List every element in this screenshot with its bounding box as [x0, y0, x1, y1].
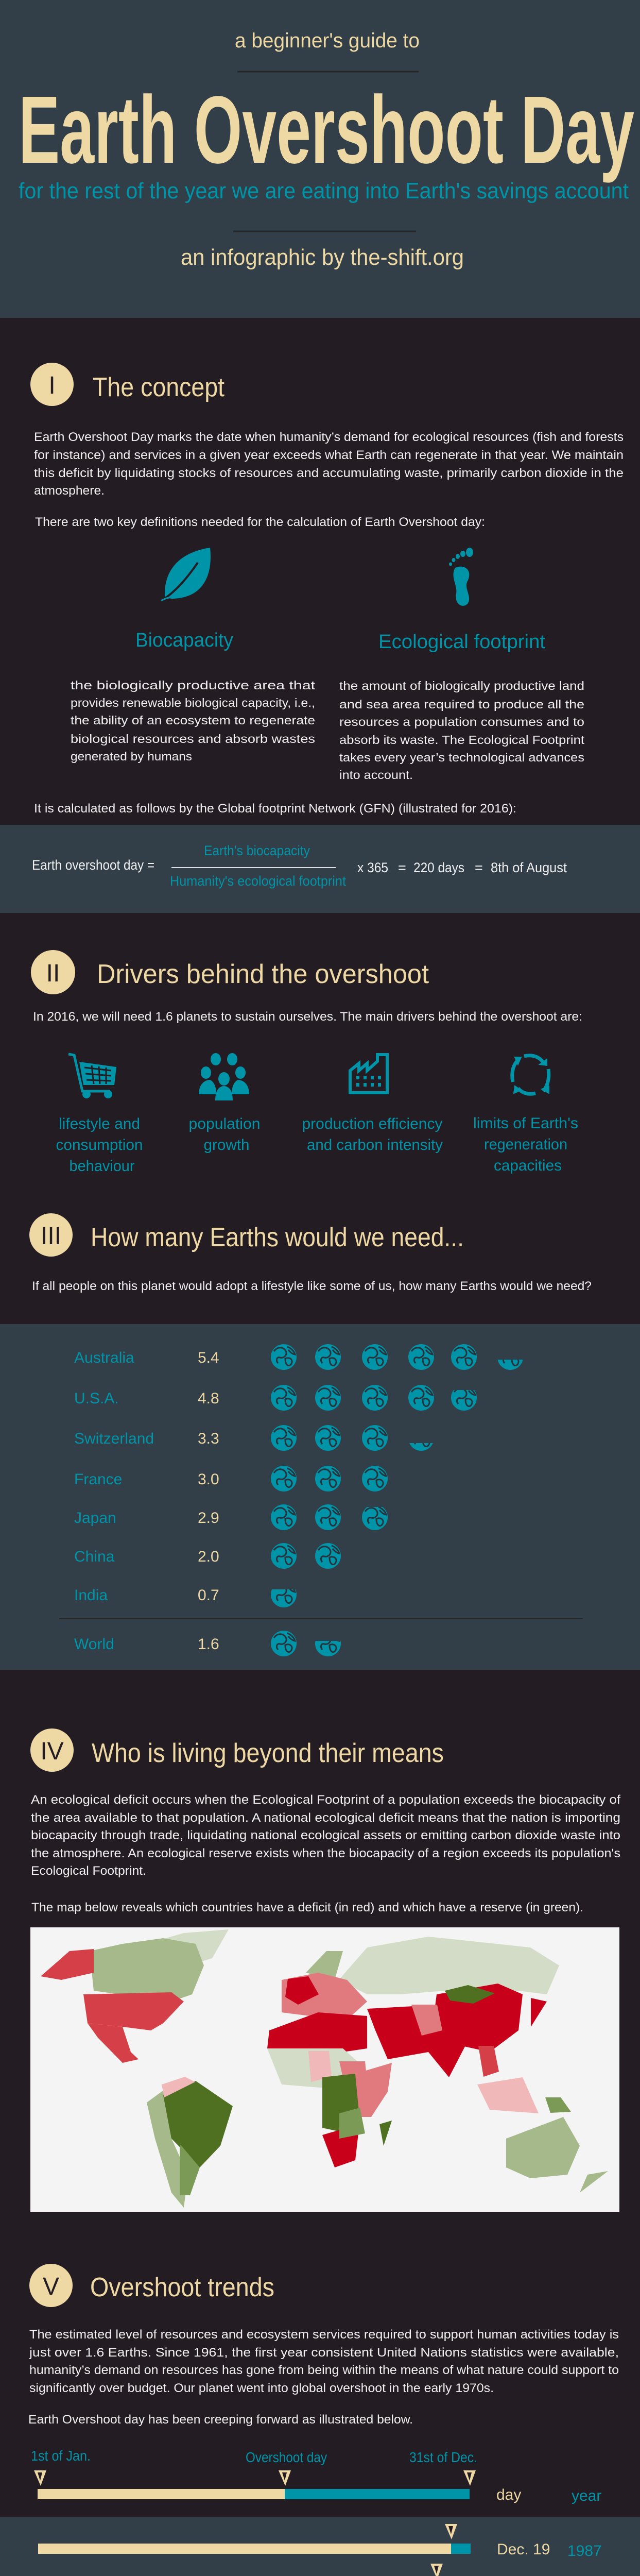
legend bar: Overshoot day — [246, 2449, 327, 2465]
question text: If all people on this planet would adopt a lifestyle like some of us, how many Earths would we need? — [32, 1279, 592, 1293]
definition: ecological footprint: resources a population consumes and to — [339, 715, 584, 728]
heading: Drivers behind the overshoot: Drivers behind the overshoot — [97, 959, 429, 989]
driver labels — [56, 1115, 578, 1175]
badge V: V — [43, 2273, 59, 2300]
driver labels: regeneration — [484, 1136, 567, 1153]
badge V — [29, 2264, 73, 2307]
deficit paragraph — [31, 1793, 620, 1878]
formula result: x 365 — [357, 860, 388, 875]
formula band: Earth overshoot day = — [32, 857, 154, 873]
badge IV: IV — [40, 1738, 64, 1765]
driver labels: consumption — [56, 1137, 143, 1154]
earths chart — [0, 1324, 640, 1670]
badge III — [29, 1213, 73, 1257]
heading: Ecological footprint: Ecological footprint — [378, 631, 545, 653]
deficit paragraph: An ecological deficit occurs when the Ecological Footprint of a population exceeds the biocapacity of — [31, 1793, 620, 1807]
country labels: China — [74, 1548, 115, 1565]
trends paragraph — [29, 2328, 619, 2395]
formula band — [0, 825, 640, 913]
driver labels: behaviour — [69, 1158, 135, 1175]
country labels — [74, 1349, 154, 1653]
definition: biocapacity: provides renewable biological capacity, i.e., — [71, 696, 315, 709]
heading: Biocapacity: Biocapacity — [135, 630, 233, 651]
formula result: = — [398, 860, 406, 875]
deficit paragraph: the atmosphere. An ecological reserve exists when the biocapacity of a region exceeds its population's — [31, 1846, 620, 1860]
trends paragraph: just over 1.6 Earths. Since 1961, the first year consistent United Nations statistics were available, — [29, 2346, 619, 2360]
badge I — [30, 363, 74, 406]
definition: ecological footprint: into account. — [339, 768, 413, 782]
timeline chart — [0, 2517, 640, 2576]
icon: footprint — [449, 548, 473, 606]
fraction: Earth's biocapacity — [204, 843, 310, 858]
legend bar: 31st of Dec. — [409, 2449, 477, 2465]
definition: ecological footprint: and sea area required to produce all the — [339, 698, 584, 711]
country labels: World — [74, 1636, 114, 1653]
row 1987 — [38, 2524, 602, 2560]
definition: ecological footprint — [339, 679, 585, 782]
legend bar — [31, 2448, 601, 2504]
icon: shopping cart — [68, 1054, 116, 1098]
deficit paragraph: the area available to that population. A national ecological deficit means that the nation is importing — [31, 1811, 620, 1825]
fraction — [170, 843, 346, 889]
definition: ecological footprint: absorb its waste. The Ecological Footprint — [339, 733, 585, 747]
trends paragraph: The estimated level of resources and ecosystem services required to support human activities today is — [29, 2328, 619, 2342]
definition: biocapacity: biological resources and absorb wastes — [71, 732, 315, 745]
definition: biocapacity: the biologically productive area that — [71, 679, 316, 692]
country labels: U.S.A. — [74, 1390, 119, 1407]
driver labels: limits of Earth's — [473, 1115, 578, 1132]
trends paragraph: humanity’s demand on resources has gone from being within the means of what nature could support to — [29, 2363, 619, 2377]
drivers intro: In 2016, we will need 1.6 planets to sustain ourselves. The main drivers behind the overshoot are: — [33, 1010, 582, 1024]
definition: biocapacity — [71, 679, 316, 763]
deficit paragraph: Ecological Footprint. — [31, 1864, 146, 1878]
intro paragraph: this deficit by liquidating stocks of resources and accumulating waste, primarily carbon dioxide in the — [34, 466, 624, 480]
country labels: India — [74, 1587, 108, 1604]
driver labels: growth — [204, 1137, 249, 1154]
badge II — [31, 950, 75, 994]
definition: ecological footprint: the amount of biologically productive land — [339, 679, 584, 692]
section II: drivers — [31, 950, 582, 1175]
values — [198, 1349, 219, 1653]
legend bar: 1st of Jan. — [31, 2448, 91, 2464]
legend bar: day — [496, 2486, 521, 2503]
section III: how many Earths — [29, 1213, 592, 1293]
icon: cycle arrows — [512, 1056, 549, 1094]
values: 0.7 — [198, 1587, 219, 1604]
section I: the concept — [30, 363, 624, 816]
world map — [30, 1927, 619, 2212]
legend bar: year — [572, 2487, 601, 2504]
driver labels: lifestyle and — [59, 1115, 140, 1132]
formula result: = — [475, 860, 483, 875]
intro paragraph: atmosphere. — [34, 484, 105, 498]
badge III: III — [41, 1223, 61, 1250]
values: 2.9 — [198, 1510, 219, 1527]
heading: How many Earths: How many Earths would we need... — [91, 1223, 464, 1252]
globe icons — [271, 1344, 523, 1656]
values: 4.8 — [198, 1390, 219, 1407]
badge IV — [30, 1728, 74, 1772]
values: 5.4 — [198, 1349, 219, 1366]
intro paragraph: Earth Overshoot Day marks the date when humanity’s demand for ecological resources (fish and forests — [34, 430, 624, 444]
definition: ecological footprint: takes every year’s technological advances — [339, 751, 584, 764]
driver labels: capacities — [494, 1157, 562, 1174]
values: 3.0 — [198, 1471, 219, 1488]
driver labels: population — [188, 1115, 261, 1132]
formula result — [357, 860, 567, 875]
country labels: France — [74, 1471, 122, 1488]
calculation intro: It is calculated as follows by the Global footprint Network (GFN) (illustrated for 2016): — [34, 802, 516, 816]
formula result: 8th of August — [491, 860, 567, 875]
kicker: a beginner's guide to: a beginner's guide to — [235, 29, 420, 52]
values: 2.0 — [198, 1548, 219, 1565]
definitions intro: There are two key definitions needed for the calculation of Earth Overshoot day: — [35, 515, 485, 529]
badge I: I — [48, 372, 56, 399]
fraction: Humanity's ecological footprint — [170, 873, 346, 889]
row 1987: Dec. 19 — [497, 2541, 550, 2558]
map intro: The map below reveals which countries have a deficit (in red) and which have a reserve (in green). — [31, 1901, 583, 1914]
heading: Who is living beyond their means: Who is living beyond their means — [92, 1738, 444, 1768]
row 1987: 1987 — [567, 2543, 602, 2560]
header band — [0, 0, 640, 318]
icon: people — [199, 1053, 249, 1100]
heading: The concept: The concept — [93, 372, 224, 402]
values: 1.6 — [198, 1636, 219, 1653]
section IV: living beyond means — [30, 1728, 620, 2212]
badge II: II — [46, 960, 60, 987]
row 1990 — [37, 2564, 601, 2576]
country labels: Switzerland — [74, 1430, 154, 1447]
definition: biocapacity: the ability of an ecosystem to regenerate — [71, 714, 315, 727]
heading: Overshoot trends: Overshoot trends — [90, 2273, 274, 2302]
timeline intro: Earth Overshoot day has been creeping forward as illustrated below. — [28, 2413, 413, 2427]
deficit paragraph: biocapacity through trade, liquidating national ecological assets or emitting carbon dioxide waste into — [31, 1828, 620, 1842]
country labels: Australia — [74, 1349, 134, 1366]
formula result: 220 days — [413, 860, 464, 875]
intro paragraph: for instance) and services in a given year exceeds what Earth can regenerate in that year. We maintain — [34, 448, 624, 462]
country labels: Japan — [74, 1510, 116, 1527]
section V: overshoot trends — [28, 2264, 619, 2504]
icon: factory — [350, 1055, 387, 1093]
values: 3.3 — [198, 1430, 219, 1447]
credit: an infographic by the-shift.org — [181, 245, 464, 270]
driver labels: production efficiency — [302, 1115, 443, 1132]
intro paragraph — [34, 430, 624, 498]
driver labels: and carbon intensity — [307, 1137, 443, 1154]
icon: leaf — [161, 548, 211, 601]
trends paragraph: significantly over budget. Our planet went into global overshoot in the early 1970s. — [29, 2381, 494, 2395]
definition: biocapacity: generated by humans — [71, 750, 192, 763]
